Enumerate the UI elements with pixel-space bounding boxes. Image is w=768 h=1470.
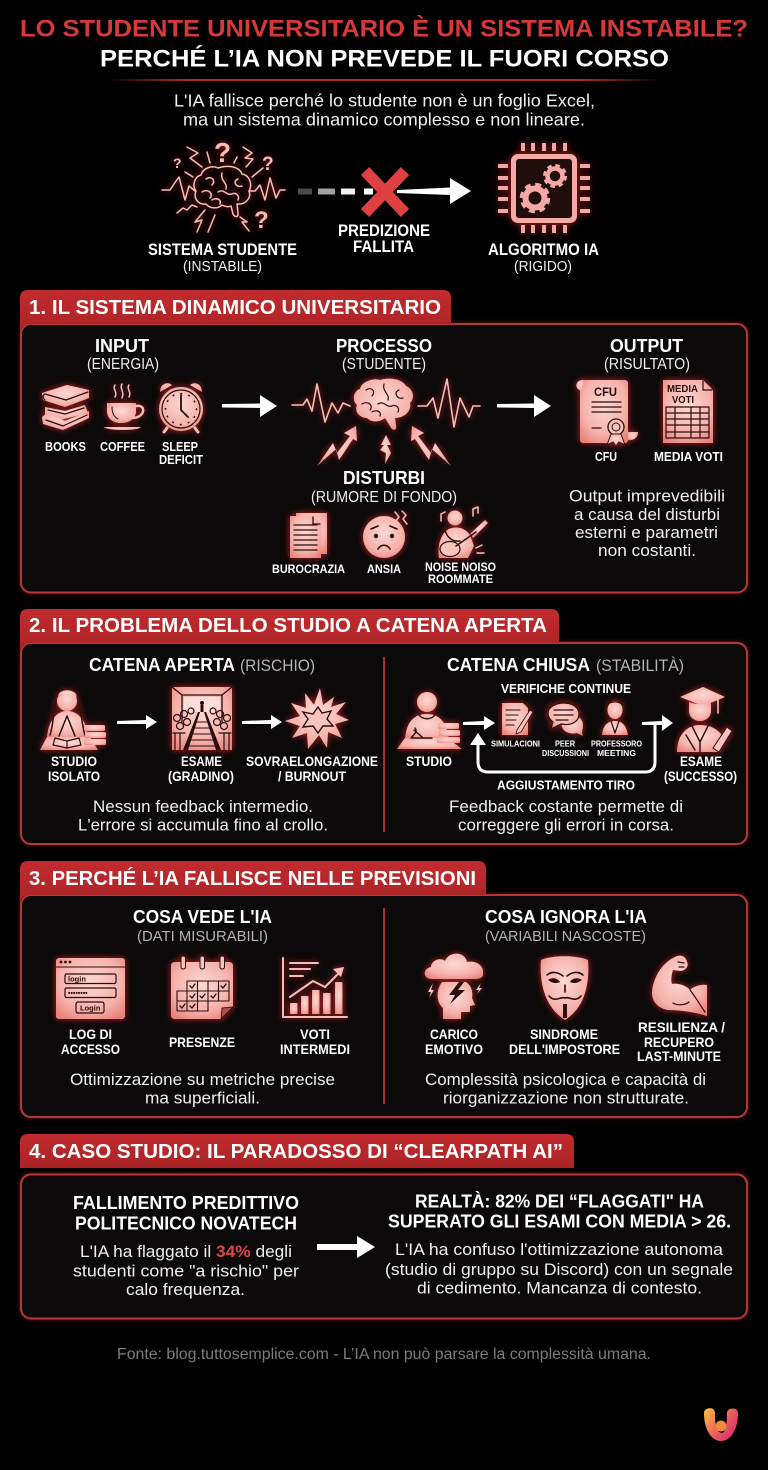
note: what AI sees (70, 1071, 335, 1108)
title (20, 14, 748, 72)
closed loop labels: ESAME (680, 753, 722, 769)
arrow: process to output (497, 395, 551, 417)
column headings: OUTPUT (610, 336, 683, 356)
heading tab: section 4: 4. CASO STUDIO: IL PARADOSSO DI “CLEARPATH AI” (29, 1140, 563, 1163)
labels: what AI ignores: EMOTIVO (425, 1041, 483, 1057)
column headings: (ENERGIA) (87, 356, 159, 373)
input labels: DEFICIT (159, 452, 203, 467)
arrow: checks to exam with feedback loop (470, 715, 673, 772)
subheading: what AI sees: COSA VEDE L'IA (133, 907, 272, 927)
intro text: L'IA fallisce perché lo studente non è un foglio Excel, (174, 90, 595, 110)
closed loop note (449, 798, 683, 834)
arrow: exam to burnout (242, 715, 282, 729)
icon: unstable brain (162, 137, 285, 234)
input labels: COFFEE (100, 439, 145, 454)
heading tab: section 1 (20, 290, 451, 334)
subheading: what AI ignores (485, 907, 647, 945)
icon: emotional load (425, 954, 483, 1019)
heading tab: section 2: 2. IL PROBLEMA DELLO STUDIO A CATENA APERTA (29, 614, 547, 637)
hero labels: PREDIZIONE (338, 222, 430, 240)
heading tab: section 1: 1. IL SISTEMA DINAMICO UNIVERSITARIO (29, 296, 441, 319)
predictive failure heading: POLITECNICO NOVATECH (75, 1214, 297, 1234)
closed loop labels: STUDIO (406, 753, 452, 769)
icon: brain with signal waves (292, 379, 480, 430)
labels: what AI ignores: CARICO (430, 1026, 478, 1042)
hero labels: FALLITA (353, 238, 414, 256)
heading tab: section 3: 3. PERCHÉ L’IA FALLISCE NELLE PREVISIONI (29, 867, 476, 890)
note: what AI sees: Ottimizzazione su metriche precise (70, 1071, 335, 1089)
hero labels: ALGORITMO IA (488, 241, 599, 259)
open loop note: L'errore si accumula fino al crollo. (78, 816, 328, 834)
subheading: closed loop (447, 655, 684, 675)
subheading: what AI ignores: COSA IGNORA L'IA (485, 907, 647, 927)
labels: what AI ignores: RESILIENZA / (638, 1019, 725, 1035)
icon: attendance calendar (171, 956, 233, 1019)
reality text (385, 1241, 733, 1298)
input labels (45, 439, 203, 467)
icon: noisy roommate with guitar (439, 507, 488, 558)
column headings: (RISULTATO) (604, 356, 690, 373)
labels: what AI sees: INTERMEDI (280, 1041, 350, 1057)
section 3 (20, 861, 747, 1117)
predictive failure text: L'IA ha flaggato il 34% degli (80, 1243, 292, 1261)
labels: what AI ignores: DELL'IMPOSTORE (509, 1041, 620, 1057)
labels: what AI ignores: LAST-MINUTE (637, 1048, 721, 1064)
icon: login window: login (68, 974, 86, 984)
closed loop note: Feedback costante permette di (449, 798, 683, 816)
note: what AI ignores: Complessità psicologica e capacità di (425, 1071, 706, 1089)
output labels (595, 449, 723, 464)
input labels: SLEEP (162, 439, 198, 454)
labels: checks (491, 738, 642, 758)
open loop labels: ESAME (181, 753, 222, 769)
labels: checks: SIMULACIONI (491, 738, 540, 748)
output note: a causa del disturbi (574, 506, 720, 524)
labels: checks: PROFESSORO (591, 738, 642, 748)
icon: login window: Login (80, 1004, 101, 1012)
icon: student at desk (397, 692, 462, 749)
open loop labels: (GRADINO) (168, 768, 234, 784)
subheading: open loop (89, 655, 315, 675)
hero labels: (INSTABILE) (183, 258, 262, 275)
arrow: study to exam (117, 715, 157, 729)
labels: what AI ignores (425, 1019, 725, 1064)
icon: anxious face (363, 511, 407, 558)
reality text: L'IA ha confuso l'ottimizzazione autonoma (395, 1241, 724, 1259)
subheading: open loop: (RISCHIO) (240, 656, 315, 675)
icon: unstable brain: ? (254, 207, 269, 234)
column headings: (STUDENTE) (342, 356, 426, 373)
labels: what AI sees: PRESENZE (169, 1034, 235, 1050)
title: LO STUDENTE UNIVERSITARIO È UN SISTEMA INSTABILE? (20, 14, 748, 42)
labels: what AI sees: VOTI (300, 1026, 330, 1042)
intro text (174, 90, 595, 130)
subheading: what AI ignores: (VARIABILI NASCOSTE) (485, 928, 646, 945)
open loop note: Nessun feedback intermedio. (93, 798, 313, 816)
note: what AI ignores: riorganizzazione non strutturate. (443, 1090, 689, 1108)
predictive failure heading: FALLIMENTO PREDITTIVO (73, 1193, 299, 1213)
icon: peer discussion (548, 703, 583, 736)
icon: unstable brain: ? (173, 155, 182, 171)
closed loop labels (406, 753, 737, 784)
reality heading: REALTÀ: 82% DEI “FLAGGATI" HA (415, 1190, 704, 1212)
note: what AI sees: ma superficiali. (145, 1090, 260, 1108)
icon: average grades sheet: VOTI (672, 394, 694, 406)
output note: non costanti. (598, 542, 696, 560)
disturbance labels: ANSIA (367, 562, 401, 576)
reality heading (388, 1190, 731, 1232)
icon: exam hall (172, 687, 232, 750)
predictive failure heading (73, 1193, 299, 1234)
icon: coffee (104, 384, 143, 430)
icon: flexed arm (652, 956, 707, 1016)
icon: AI chip (498, 143, 590, 233)
output labels: MEDIA VOTI (654, 449, 723, 464)
predictive failure text: studenti come "a rischio" per (73, 1262, 300, 1280)
section 4 (20, 1134, 747, 1318)
output labels: CFU (595, 449, 617, 464)
icon: unstable brain: ? (262, 154, 274, 175)
disturbance labels: BUROCRAZIA (272, 562, 345, 576)
intro text: ma un sistema dinamico complesso e non lineare. (183, 110, 585, 130)
section 2 (20, 609, 747, 844)
labels: checks: PEER (555, 738, 575, 748)
disturbance heading: (RUMORE DI FONDO) (311, 489, 457, 506)
hero labels: SISTEMA STUDENTE (148, 241, 297, 259)
output note: Output imprevedibili (569, 488, 725, 506)
icon: login window: •••••••• (68, 990, 88, 998)
panel: case study (21, 1174, 747, 1318)
labels: what AI ignores: SINDROME (530, 1026, 598, 1042)
icon: grades chart (283, 958, 347, 1017)
icons: disturbance bolts (317, 426, 451, 466)
predictive failure text: calo frequenza. (126, 1281, 245, 1299)
continuous checks: VERIFICHE CONTINUE (501, 681, 631, 696)
disturbance heading: DISTURBI (343, 467, 425, 488)
output note: esterni e parametri (575, 524, 718, 542)
panel: AI sees and ignores (21, 895, 747, 1117)
predictive failure text (73, 1243, 300, 1299)
icon: alarm clock (159, 383, 203, 432)
icon: books (42, 385, 89, 430)
open loop labels: ISOLATO (48, 768, 100, 784)
labels: checks: DISCUSSIONI (542, 748, 589, 758)
subheading: closed loop: (STABILITÀ) (596, 656, 684, 675)
icon: CFU certificate: CFU (594, 387, 617, 399)
open loop note (78, 798, 328, 834)
reality heading: SUPERATO GLI ESAMI CON MEDIA > 26. (388, 1212, 731, 1232)
icon: burnout explosion (285, 688, 349, 749)
heading tab: section 3 (20, 861, 486, 905)
column headings (87, 336, 690, 373)
icon: login window (56, 958, 125, 1019)
icon: red cross (365, 171, 405, 213)
closed loop labels: (SUCCESSO) (664, 768, 737, 784)
labels: what AI sees (61, 1026, 350, 1057)
arrow: study to checks (463, 716, 495, 730)
arrow: dashed failing prediction (298, 178, 471, 204)
icon: logo (704, 1408, 738, 1441)
icon: average grades sheet: MEDIA (667, 383, 698, 395)
open loop labels (48, 753, 378, 784)
disturbance labels: NOISE NOISO (425, 560, 496, 574)
heading tab: section 2 (20, 609, 559, 653)
disturbance labels: ROOMMATE (428, 572, 493, 586)
labels: what AI sees: ACCESSO (61, 1041, 120, 1057)
arrow: prediction to reality (317, 1236, 375, 1258)
closed loop note: correggere gli errori in corsa. (458, 816, 674, 834)
icon: paperwork (290, 513, 327, 558)
open loop labels: SOVRAELONGAZIONE (246, 753, 378, 769)
reality text: di cedimento. Mancanza di contesto. (417, 1280, 702, 1298)
icon: unstable brain: ? (214, 137, 231, 168)
labels: checks: MEETING (597, 748, 636, 758)
heading tab: section 4 (20, 1134, 574, 1168)
continuous checks (491, 681, 642, 758)
icon: graduate (677, 687, 732, 752)
labels: what AI ignores: RECUPERO (644, 1034, 714, 1050)
panel: dynamic system (21, 324, 747, 592)
output note (569, 488, 725, 560)
section 1 (20, 290, 747, 592)
disturbance heading (311, 467, 457, 506)
disturbance labels (272, 560, 496, 586)
arrow: input to process (222, 395, 277, 417)
icon: professor (602, 701, 628, 735)
open loop labels: / BURNOUT (278, 768, 346, 784)
panel: open and closed loop (21, 643, 747, 844)
subheading: what AI sees (133, 907, 272, 945)
subheading: closed loop: CATENA CHIUSA (447, 655, 590, 675)
column headings: PROCESSO (336, 336, 432, 356)
column headings: INPUT (95, 336, 149, 356)
icon: CFU certificate (576, 380, 638, 446)
source footer: Fonte: blog.tuttosemplice.com - L’IA non può parsare la complessità umana. (117, 1346, 651, 1363)
input labels: BOOKS (45, 439, 86, 454)
open loop labels: STUDIO (51, 753, 97, 769)
icon: isolated student (40, 690, 106, 750)
loop label: AGGIUSTAMENTO TIRO (497, 778, 635, 792)
icon: simulation sheet (502, 703, 533, 735)
icon: impostor mask (541, 956, 588, 1020)
note: what AI ignores (425, 1071, 706, 1108)
reality text: (studio di gruppo su Discord) con un segnale (385, 1261, 733, 1279)
title: PERCHÉ L’IA NON PREVEDE IL FUORI CORSO (100, 44, 669, 72)
icon: average grades sheet (663, 380, 713, 443)
subheading: open loop: CATENA APERTA (89, 655, 235, 675)
labels: what AI sees: LOG DI (69, 1026, 112, 1042)
hero labels (148, 222, 599, 275)
hero labels: (RIGIDO) (514, 258, 572, 275)
subheading: what AI sees: (DATI MISURABILI) (137, 928, 268, 945)
